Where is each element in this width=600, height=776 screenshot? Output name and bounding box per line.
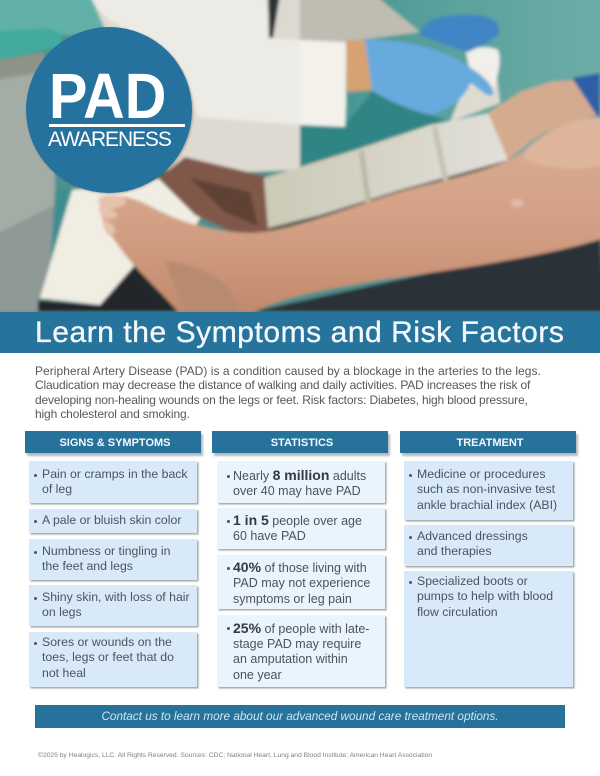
symptom card: pain: Pain or cramps in the back xyxy=(42,467,188,481)
symptom card: sores: not heal xyxy=(42,666,86,680)
symptom card: pain xyxy=(29,461,197,503)
treatment card: medicine: ankle brachial index (ABI) xyxy=(417,498,557,512)
statistic card: 40%: PAD may not experience xyxy=(233,576,370,590)
symptom card: skin color xyxy=(29,509,197,533)
statistic card: 40%: 40% of those living with xyxy=(233,559,367,575)
badge text: AWARENESS: AWARENESS xyxy=(48,128,171,151)
treatment card: medicine xyxy=(404,461,573,520)
intro paragraph: developing non-healing wounds on the legs or feet. Risk factors: Diabetes, high blood pressure, xyxy=(35,393,528,407)
column heading: statistics: STATISTICS xyxy=(271,437,333,449)
badge rule xyxy=(49,124,185,127)
treatment card: dressings: Advanced dressings xyxy=(417,529,528,543)
column heading: statistics xyxy=(212,431,388,453)
symptom card: numbness: the feet and legs xyxy=(42,559,133,573)
treatment card: boots and pumps: flow circulation xyxy=(417,605,498,619)
badge: PAD Awareness xyxy=(26,27,192,193)
symptom card: sores: Sores or wounds on the xyxy=(42,635,172,649)
symptom card: pain: of leg xyxy=(42,482,72,496)
column heading: signs and symptoms: SIGNS & SYMPTOMS xyxy=(59,437,171,449)
title: Learn the Symptoms and Risk Factors xyxy=(35,316,564,349)
statistic card: 25%: an amputation within xyxy=(233,652,348,666)
treatment card: boots and pumps: pumps to help with blood xyxy=(417,589,553,603)
column heading: treatment: TREATMENT xyxy=(456,437,524,449)
treatment card: dressings xyxy=(404,525,573,566)
treatment card: dressings: and therapies xyxy=(417,544,492,558)
symptom card: skin color: A pale or bluish skin color xyxy=(42,513,181,527)
intro paragraph: Claudication may decrease the distance of walking and daily activities. PAD increases the risk of xyxy=(35,378,530,392)
statistic card: 25%: stage PAD may require xyxy=(233,637,361,651)
symptom card: shiny skin: Shiny skin, with loss of hair xyxy=(42,590,190,604)
statistic card: 8 million: over 40 may have PAD xyxy=(233,484,361,498)
symptom card: numbness: Numbness or tingling in xyxy=(42,544,170,558)
footer sources: ©2025 by Healogics, LLC. All Rights Reserved. Sources: CDC; National Heart, Lung and Blood Institute; American Heart Association xyxy=(38,752,432,759)
statistic card: 25%: 25% of people with late- xyxy=(233,620,369,636)
call to action bar: Contact us to learn more about our advanced wound care treatment options. xyxy=(101,710,499,723)
treatment card: medicine: such as non-invasive test xyxy=(417,482,555,496)
statistic card: 8 million xyxy=(217,461,385,503)
statistic card: 40%: symptoms or leg pain xyxy=(233,592,352,606)
statistic card: 1 in 5 xyxy=(217,508,385,549)
statistic card: 1 in 5: 1 in 5 people over age xyxy=(233,512,362,528)
intro paragraph: high cholesterol and smoking. xyxy=(35,407,190,421)
symptom card: sores xyxy=(29,632,197,687)
symptom card: numbness xyxy=(29,539,197,580)
treatment card: boots and pumps xyxy=(404,571,573,687)
statistic card: 8 million: Nearly 8 million adults xyxy=(233,467,366,483)
intro paragraph: Peripheral Artery Disease (PAD) is a condition caused by a blockage in the arteries to the legs. xyxy=(35,364,541,378)
column heading: signs and symptoms xyxy=(25,431,201,453)
title banner xyxy=(0,312,600,353)
treatment card: boots and pumps: Specialized boots or xyxy=(417,574,528,588)
statistic card: 40% xyxy=(217,555,385,609)
hero photo: clinician bandaging a patient's leg xyxy=(0,0,600,312)
call to action bar xyxy=(35,705,565,728)
badge text: PAD: PAD xyxy=(49,60,166,132)
statistic card: 25% xyxy=(217,615,385,687)
statistic card: 1 in 5: 60 have PAD xyxy=(233,529,306,543)
intro paragraph xyxy=(35,364,541,421)
symptom card: shiny skin: on legs xyxy=(42,605,82,619)
symptom card: sores: toes, legs or feet that do xyxy=(42,650,174,664)
treatment card: medicine: Medicine or procedures xyxy=(417,467,546,481)
symptom card: shiny skin xyxy=(29,585,197,626)
statistic card: 25%: one year xyxy=(233,668,282,682)
column heading: treatment xyxy=(400,431,576,453)
